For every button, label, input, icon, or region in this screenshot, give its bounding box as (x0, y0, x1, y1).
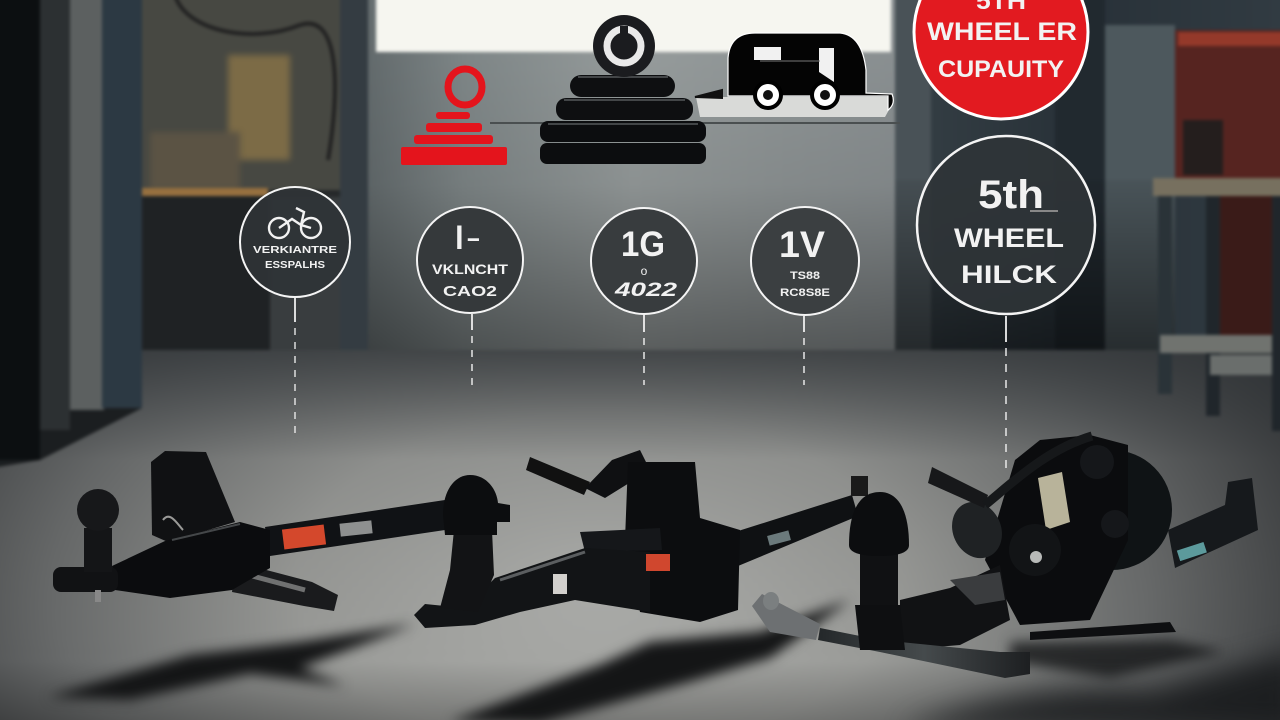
floor shadows under hitches (48, 600, 1225, 720)
icon: red stacked hitch symbol (401, 69, 507, 165)
badge: red capacity circle (914, 0, 1088, 119)
badge: weight circle: VKLNCHT (432, 261, 509, 277)
badge: 1V circle (751, 207, 859, 385)
badge: 5th wheel hitch circle: 5th (978, 173, 1044, 217)
badge: 1G circle: 1G (621, 225, 665, 264)
icon: black caravan with trailer (695, 33, 893, 117)
badge: weight circle: CAO2 (443, 283, 497, 300)
badge: weight circle: I- (453, 219, 481, 257)
badge: 1G circle (591, 208, 697, 385)
badge: 1V circle: 1V (779, 224, 825, 265)
hitch 1: ball mount with long bar (53, 451, 445, 611)
badge: versatile bike icon circle: ESSPALHS (265, 260, 325, 271)
badge: versatile bike icon circle (240, 187, 350, 440)
badge: 1G circle: o (641, 264, 648, 278)
badge: versatile bike icon circle: VERKIANTRE (253, 245, 337, 256)
hitch 2: centre pin mount (414, 450, 868, 628)
decorative horizon line behind icons (490, 122, 900, 124)
badge: 1V circle: RC8S8E (780, 287, 830, 299)
icon: black stacked tyres (540, 15, 706, 164)
badge: weight circle (417, 207, 523, 390)
hitch 3: fifth wheel mount (752, 435, 1258, 678)
badge: red capacity circle: WHEEL ER (927, 18, 1077, 46)
badge: 5th wheel hitch circle (917, 136, 1095, 470)
badge: 1G circle: 4022 (614, 280, 678, 301)
badge: 1V circle: TS88 (790, 270, 820, 282)
badge: 5th wheel hitch circle: WHEEL (954, 223, 1064, 253)
badge: 5th wheel hitch circle: HILCK (961, 261, 1057, 289)
decorative dark floor corner (900, 650, 1280, 720)
badge: red capacity circle: CUPAUITY (938, 56, 1064, 83)
